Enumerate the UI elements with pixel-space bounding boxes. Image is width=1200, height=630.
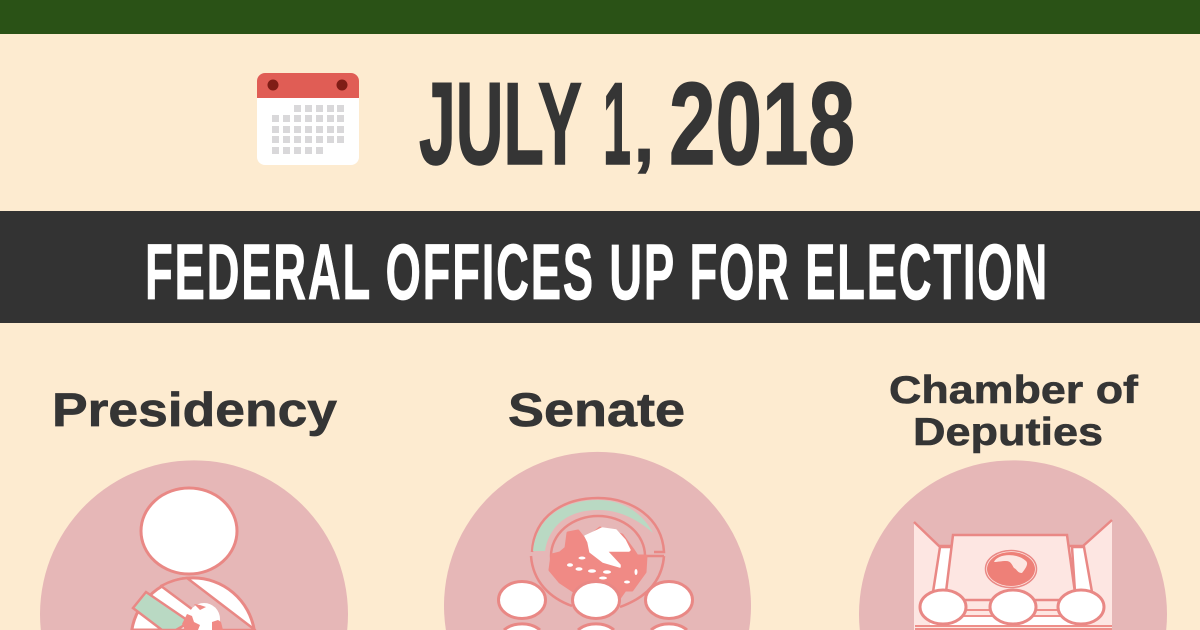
panel: chamber of deputies icon [859,460,1167,630]
panel: presidency icon [40,460,348,630]
top green bar [0,0,1200,34]
date heading: 2018 [669,58,855,189]
seal rings [531,498,664,607]
heading: Chamber of Deputies [889,369,1139,454]
panel: senate icon [444,452,751,630]
deputy heads [920,590,1104,624]
dark banner [0,211,1200,323]
head [141,488,237,574]
heading: Chamber of Deputies: Deputies [913,411,1103,454]
date heading: JULY [419,58,582,189]
heading: Chamber of Deputies: Chamber of [889,369,1139,412]
body with sash [132,578,255,630]
date heading [419,58,855,189]
chamber walls [914,520,1112,630]
senator heads [498,582,692,630]
eagle seal [550,528,646,600]
dais [945,535,1076,600]
seal [986,550,1036,588]
date heading: 1 [603,58,631,189]
heading: Presidency: Presidency [52,383,337,436]
date heading: , [634,90,654,178]
icon: calendar [257,73,359,165]
heading: Senate: Senate [508,383,685,436]
